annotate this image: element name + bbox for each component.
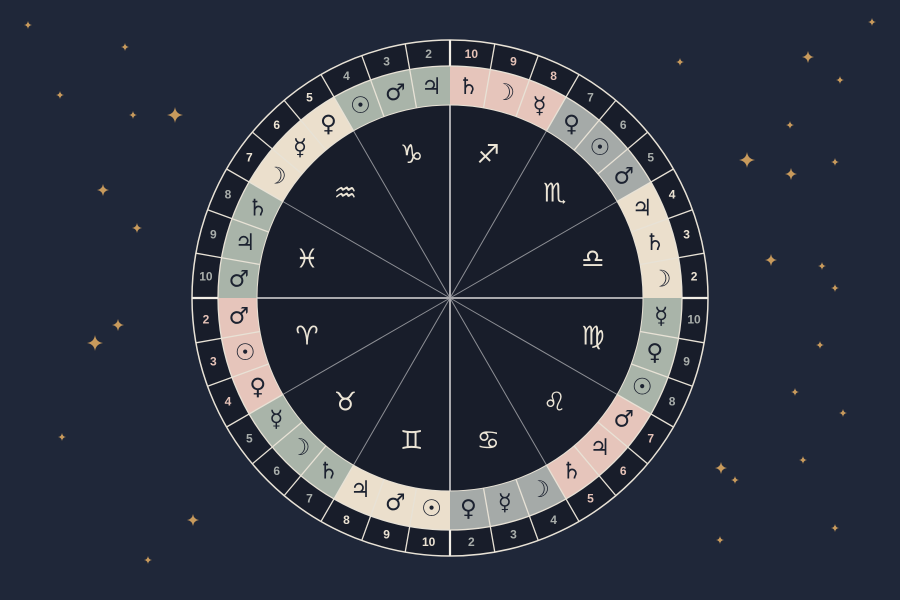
sector: aries: 3 <box>210 354 217 368</box>
sector: scorpio: ☉ <box>590 135 610 161</box>
sector: sagittarius: ♄ <box>458 74 479 100</box>
sector: aries: 2 <box>203 312 210 326</box>
sector: capricorn: 2 <box>425 47 432 61</box>
sector: pisces: ♄ <box>248 195 268 221</box>
sector: pisces: 9 <box>210 228 217 242</box>
sector: pisces: 8 <box>225 187 232 201</box>
sector: cancer <box>411 404 577 575</box>
sector: pisces: ♂ <box>228 267 249 293</box>
sector: sagittarius: ☿ <box>533 93 547 119</box>
sector: capricorn: ♑︎ <box>400 140 423 170</box>
sector: capricorn <box>323 20 490 192</box>
sector: virgo: ☿ <box>654 303 668 329</box>
sector: taurus: ♄ <box>318 459 339 485</box>
sector: aries: ☉ <box>235 340 256 366</box>
sector: gemini: 10 <box>422 535 436 549</box>
sector: leo: ♂ <box>613 407 634 433</box>
sector: taurus: 7 <box>306 492 313 506</box>
sector: sagittarius <box>450 45 568 176</box>
sector: cancer: ♋︎ <box>477 426 500 456</box>
sector: sagittarius: 10 <box>465 47 478 61</box>
sector: virgo: ♍︎ <box>581 321 605 351</box>
sector: taurus: ♉︎ <box>334 388 357 418</box>
sector: gemini <box>330 420 450 551</box>
sector: aries: 4 <box>225 395 232 409</box>
sector: cancer: 3 <box>510 528 517 542</box>
sector: libra: 3 <box>683 228 690 242</box>
sector: aquarius: ☿ <box>293 135 307 161</box>
sector: virgo: ☉ <box>632 375 652 401</box>
sector: cancer: 2 <box>468 535 475 549</box>
sector: sagittarius: 8 <box>550 69 557 83</box>
sector: aquarius: ☽ <box>266 163 287 189</box>
sector: libra: 2 <box>691 270 698 284</box>
sector: virgo: ♀ <box>646 340 663 366</box>
sector: gemini: 9 <box>383 528 390 542</box>
sector: cancer: ☽ <box>529 477 550 503</box>
sector: leo <box>493 358 669 529</box>
spokes <box>192 40 708 556</box>
sector: scorpio: ♏︎ <box>543 178 566 208</box>
sector: capricorn: ♂ <box>385 80 405 106</box>
sector: leo: ♄ <box>561 459 582 485</box>
sector: pisces: 10 <box>199 270 213 284</box>
zodiac wheel <box>173 20 727 575</box>
sector: taurus: ☽ <box>290 435 310 461</box>
sector: aries <box>173 258 343 424</box>
sector: aquarius <box>232 68 406 238</box>
sector: sagittarius: ☽ <box>495 80 515 106</box>
sector: aquarius: ♀ <box>320 111 337 137</box>
sector: leo: 6 <box>620 464 627 478</box>
sector: gemini: ☉ <box>421 496 442 522</box>
sector: taurus <box>220 342 390 517</box>
sector: virgo: 10 <box>687 312 701 326</box>
sector: gemini: 8 <box>343 513 350 527</box>
sector: gemini: ♊︎ <box>400 426 423 456</box>
sector: gemini: ♂ <box>385 490 405 516</box>
sector: scorpio: 6 <box>620 118 627 132</box>
sector: pisces: ♓︎ <box>295 245 319 275</box>
sector: cancer: ☿ <box>498 490 512 516</box>
sector: aquarius: 6 <box>273 118 280 132</box>
sector: sagittarius: 9 <box>510 54 517 68</box>
sector: pisces: ♃ <box>235 230 256 256</box>
sector: cancer: ♀ <box>460 496 477 522</box>
sector: aries: ♈︎ <box>295 321 319 351</box>
sector: taurus: ☿ <box>269 407 283 433</box>
sector: aquarius: 5 <box>306 90 313 104</box>
sector: leo: ♃ <box>590 435 610 461</box>
sector: capricorn: 3 <box>383 54 390 68</box>
sector: leo: 7 <box>647 432 654 446</box>
sector: aquarius: 7 <box>246 150 253 164</box>
sector: scorpio: ♀ <box>563 111 580 137</box>
sector: virgo: 8 <box>669 395 676 409</box>
sector: taurus: 5 <box>246 432 253 446</box>
sector: libra: 4 <box>669 187 676 201</box>
sector: libra: ♄ <box>644 230 665 256</box>
sector: virgo: 9 <box>683 354 690 368</box>
sector: aries: ♀ <box>249 375 266 401</box>
sector: leo: 5 <box>587 492 594 506</box>
sector: pisces <box>197 177 326 298</box>
sector: taurus: 6 <box>273 464 280 478</box>
sector: scorpio: 7 <box>587 90 594 104</box>
sector: virgo <box>574 298 703 419</box>
sector: capricorn: 4 <box>343 69 350 83</box>
sector: capricorn: ♃ <box>421 74 442 100</box>
sector: aquarius: ♒︎ <box>334 178 357 208</box>
sector: libra: ♎︎ <box>581 245 605 275</box>
sector: libra: ☽ <box>651 267 672 293</box>
sector: scorpio: ♂ <box>613 163 634 189</box>
sector: capricorn: ☉ <box>350 93 371 119</box>
sector: cancer: 4 <box>550 513 557 527</box>
sector: scorpio: 5 <box>647 150 654 164</box>
sector: aries: ♂ <box>228 303 249 329</box>
sector: scorpio <box>510 79 682 255</box>
sector: libra <box>557 172 727 338</box>
sector: gemini: ♃ <box>350 477 371 503</box>
sector: libra: ♃ <box>632 195 652 221</box>
sector: sagittarius: ♐︎ <box>477 140 500 170</box>
sector: leo: ♌︎ <box>543 388 566 418</box>
